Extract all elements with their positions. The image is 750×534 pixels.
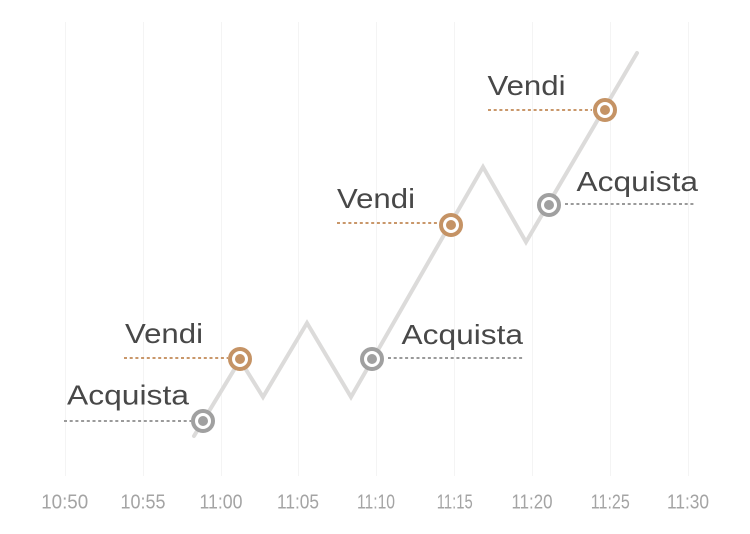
time axis labels: 10:55 [120,492,166,514]
time axis labels: 11:30 [667,492,709,514]
signal: Acquista at 11:21: Acquista [576,166,699,197]
time axis labels [41,492,709,514]
price line [194,53,637,436]
signal: Vendi at 11:01: Vendi [125,318,203,349]
signal: Acquista at 11:21 [539,166,699,215]
time axis labels: 11:20 [512,492,552,514]
time axis labels: 11:15 [437,492,473,514]
signal: Vendi at 11:15: Vendi [337,183,415,214]
time axis labels: 11:25 [591,492,630,514]
signal: Acquista at 11:10: Acquista [402,319,524,350]
signal: Vendi at 11:25: Vendi [488,70,566,101]
signal: Vendi at 11:01 [124,318,250,369]
signal: Acquista at 10:59 [64,380,213,431]
signal: Acquista at 11:10 [362,319,524,369]
time axis labels: 10:50 [41,492,88,514]
signal: Vendi at 11:15 [337,183,461,235]
signal: Acquista at 10:59: Acquista [67,380,190,410]
signal: Vendi at 11:25 [488,70,615,120]
time axis labels: 11:05 [277,492,319,514]
time axis labels: 11:00 [200,492,242,514]
time axis labels: 11:10 [357,492,395,514]
